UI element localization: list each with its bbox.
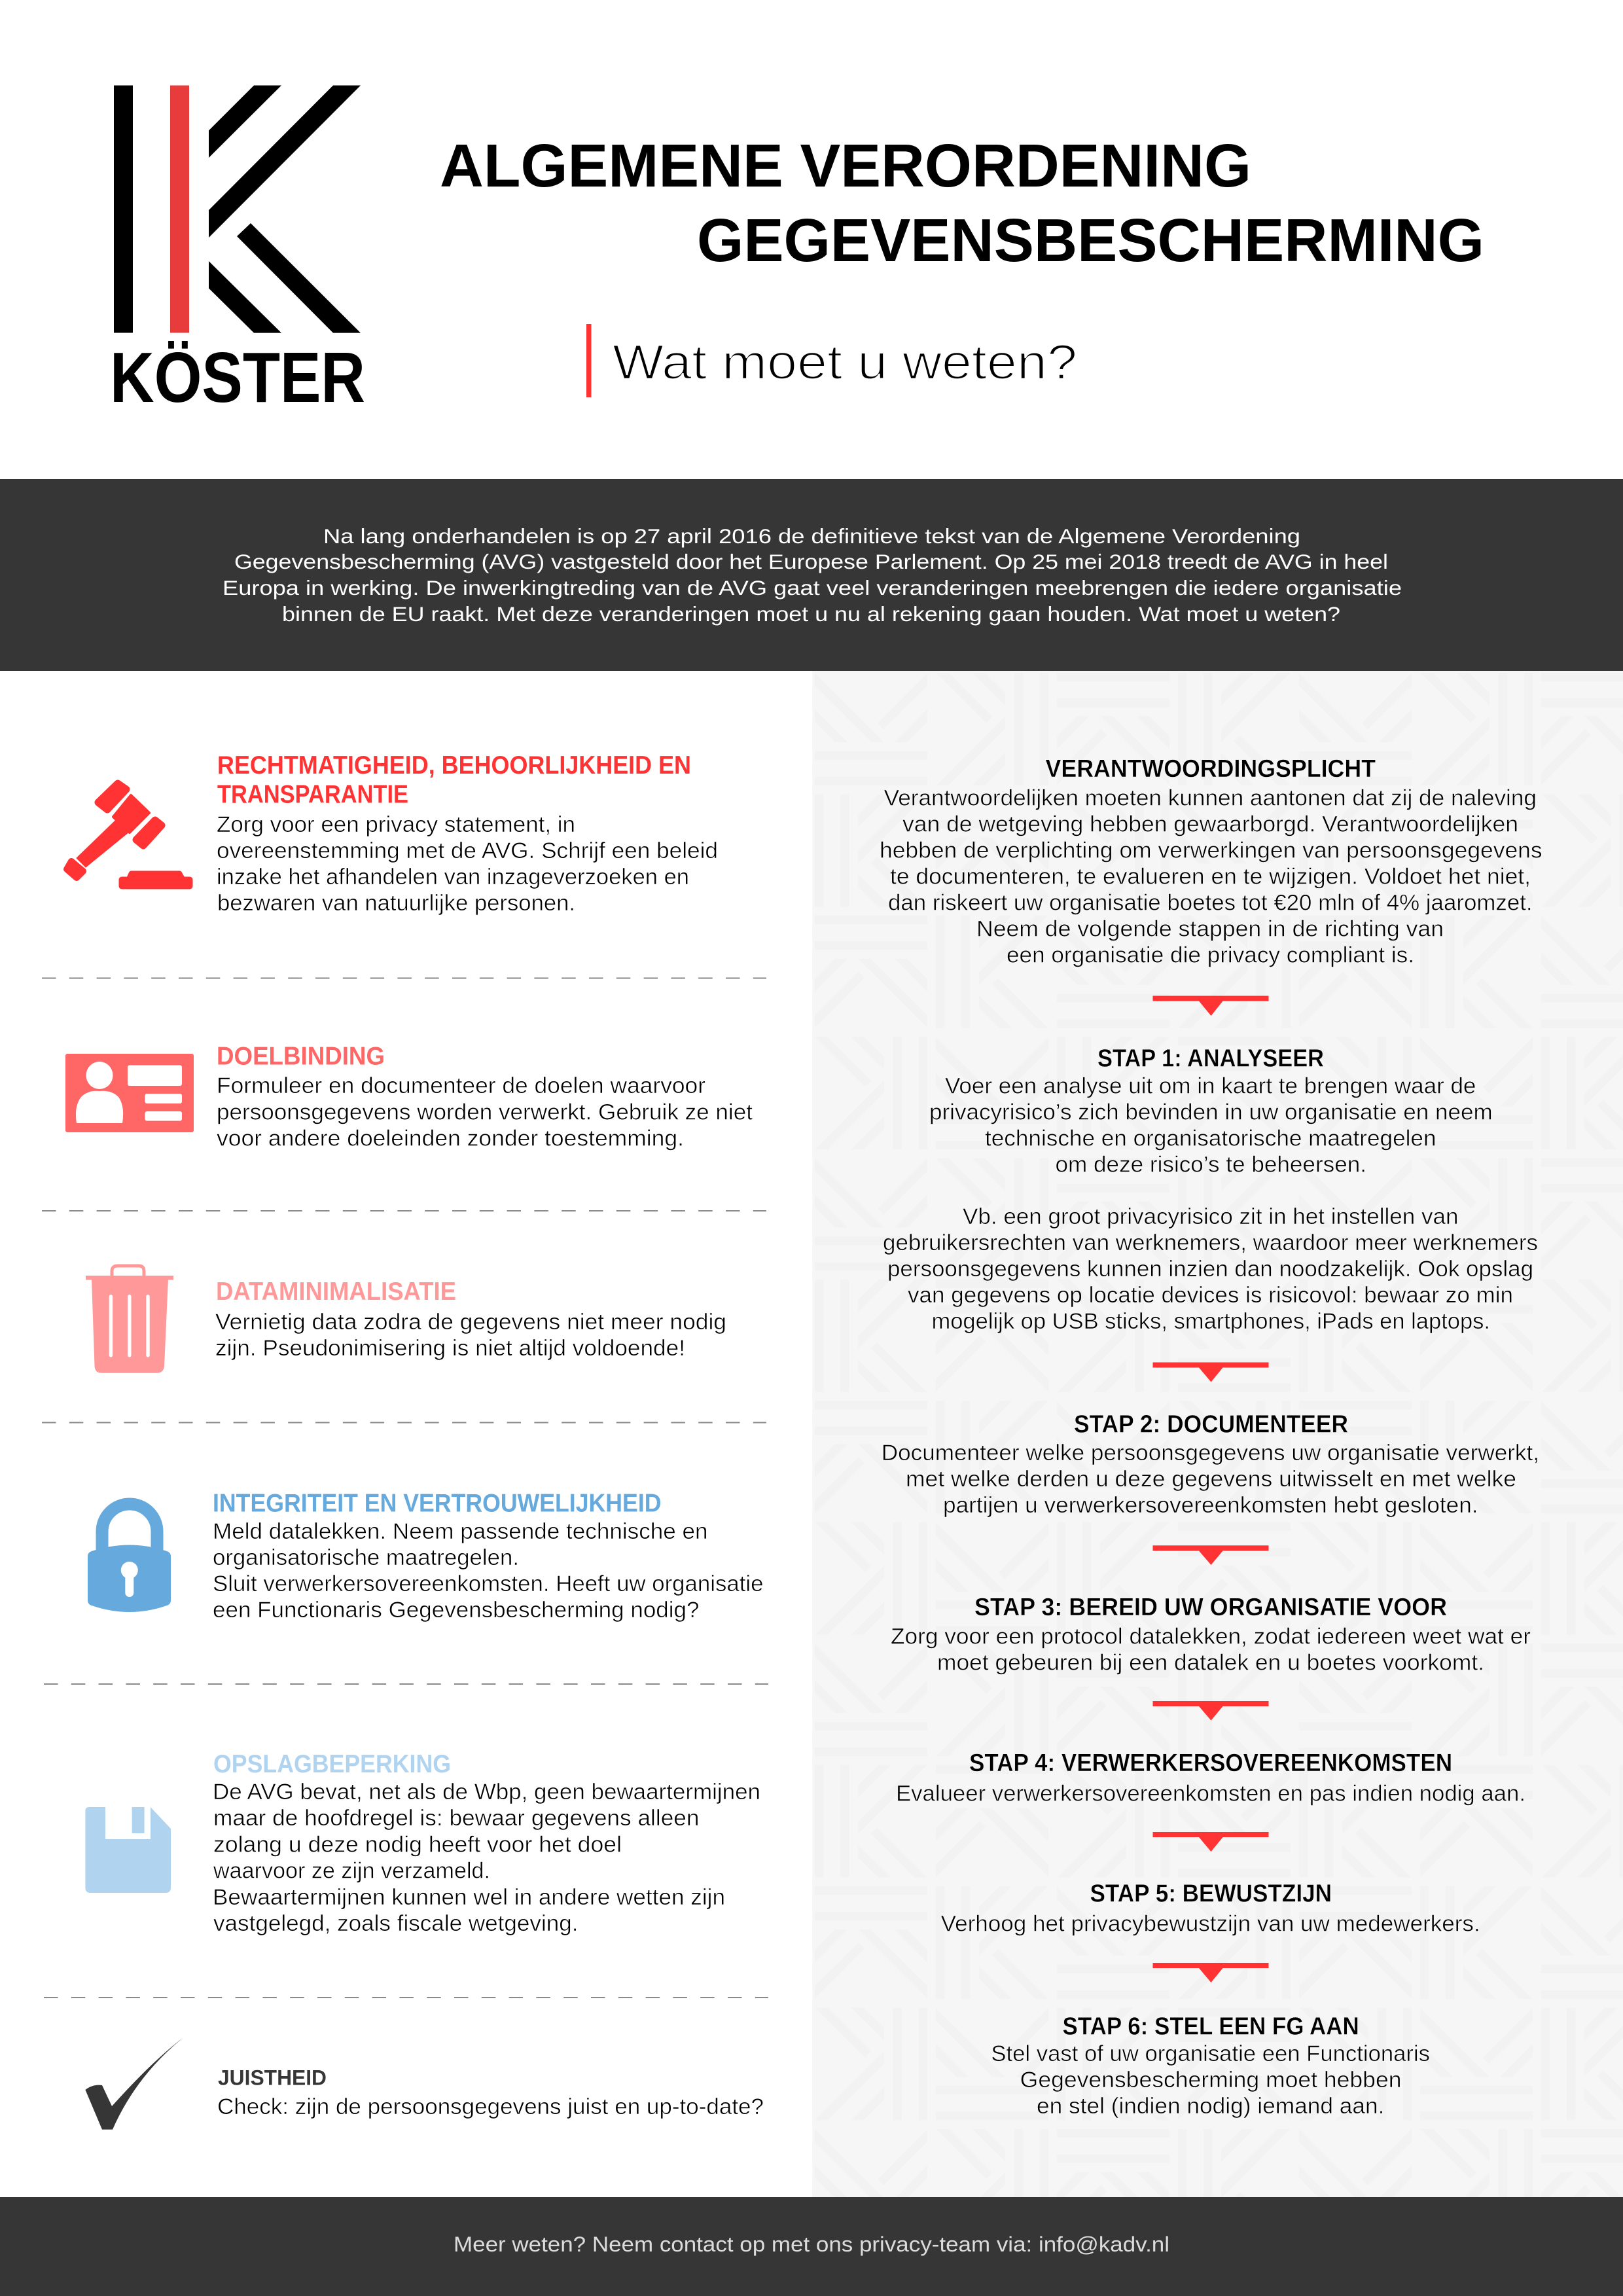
body text: Vernietig data zodra de gegevens niet meer nodig xyxy=(215,1310,726,1335)
body text xyxy=(991,2041,1430,2119)
body text: Zorg voor een privacy statement, in xyxy=(217,812,575,837)
body text: De AVG bevat, net als de Wbp, geen bewaartermijnen xyxy=(213,1780,760,1804)
body text: Vb. een groot privacyrisico zit in het instellen van xyxy=(963,1204,1458,1229)
heading: DATAMINIMALISATIE xyxy=(216,1278,456,1306)
body text: Sluit verwerkersovereenkomsten. Heeft uw organisatie xyxy=(213,1571,763,1596)
heading: STAP 5: BEWUSTZIJN xyxy=(1090,1880,1332,1908)
body text xyxy=(883,1073,1538,1334)
footer text: Meer weten? Neem contact op met ons privacy-team via: info@kadv.nl xyxy=(454,2233,1169,2256)
icon: floppy disk xyxy=(85,1807,171,1893)
title: GEGEVENSBESCHERMING xyxy=(697,206,1484,274)
subtitle with red bar: Wat moet u weten? xyxy=(613,334,1077,389)
arrow xyxy=(1153,996,1268,1016)
intro text: Na lang onderhandelen is op 27 april 2016 de definitieve tekst van de Algemene Verordening xyxy=(323,524,1300,548)
panel: right column patterned background xyxy=(812,671,1623,2296)
body text: een Functionaris Gegevensbescherming nodig? xyxy=(213,1598,699,1623)
body text xyxy=(217,1073,753,1151)
panel: juistheid xyxy=(85,2038,764,2130)
section: stap 5 xyxy=(941,1880,1480,1937)
body text: zolang u deze nodig heeft voor het doel xyxy=(213,1833,622,1857)
body text: gebruikersrechten van werknemers, waardoor meer werknemers xyxy=(883,1230,1538,1255)
body text: mogelijk op USB sticks, smartphones, iPads en laptops. xyxy=(932,1309,1490,1334)
subtitle with red bar xyxy=(586,324,1077,397)
body text: Stel vast of uw organisatie een Functionaris xyxy=(991,2041,1430,2066)
body text xyxy=(217,812,718,916)
body text: van gegevens op locatie devices is risicovol: bewaar zo min xyxy=(908,1283,1513,1308)
body text: een organisatie die privacy compliant is. xyxy=(1007,942,1414,967)
body text: privacyrisico’s zich bevinden in uw organisatie en neem xyxy=(929,1100,1493,1124)
body text: maar de hoofdregel is: bewaar gegevens alleen xyxy=(213,1806,699,1831)
icon: id card xyxy=(65,1054,194,1132)
body text: persoonsgegevens worden verwerkt. Gebruik ze niet xyxy=(217,1100,753,1124)
heading: DOELBINDING xyxy=(217,1042,385,1071)
arrow xyxy=(1153,1363,1268,1382)
heading: STAP 1: ANALYSEER xyxy=(1097,1045,1324,1072)
body text: Formuleer en documenteer de doelen waarvoor xyxy=(217,1073,705,1098)
header xyxy=(110,85,1484,418)
body text: overeenstemming met de AVG. Schrijf een beleid xyxy=(217,838,718,863)
heading: STAP 4: VERWERKERSOVEREENKOMSTEN xyxy=(969,1749,1452,1777)
body text xyxy=(880,785,1543,967)
body text: Meld datalekken. Neem passende technische en xyxy=(213,1519,708,1544)
intro text: Gegevensbescherming (AVG) vastgesteld door het Europese Parlement. Op 25 mei 2018 treedt de AVG in heel xyxy=(234,550,1388,573)
body text: vastgelegd, zoals fiscale wetgeving. xyxy=(213,1911,579,1936)
body text: Verhoog het privacybewustzijn van uw medewerkers. xyxy=(941,1912,1480,1937)
body text: persoonsgegevens kunnen inzien dan noodzakelijk. Ook opslag xyxy=(887,1257,1533,1282)
arrow xyxy=(1153,1701,1268,1721)
body text: en stel (indien nodig) iemand aan. xyxy=(1037,2094,1384,2119)
body text: om deze risico’s te beheersen. xyxy=(1055,1152,1366,1177)
body text: organisatorische maatregelen. xyxy=(213,1545,519,1570)
heading: VERANTWOORDINGSPLICHT xyxy=(1046,755,1376,783)
section: stap 6 xyxy=(991,2013,1430,2119)
body text: dan riskeert uw organisatie boetes tot €20 mln of 4% jaaromzet. xyxy=(888,890,1533,915)
intro text: binnen de EU raakt. Met deze veranderingen moet u nu al rekening gaan houden. Wat moet u weten? xyxy=(282,602,1340,626)
footer xyxy=(0,2197,1623,2296)
body text xyxy=(213,1519,763,1623)
heading: STAP 3: BEREID UW ORGANISATIE VOOR xyxy=(974,1594,1447,1621)
heading: STAP 6: STEL EEN FG AAN xyxy=(1063,2013,1359,2041)
section: stap 1 xyxy=(883,1045,1538,1334)
panel: integriteit xyxy=(88,1490,763,1623)
section: stap 4 xyxy=(896,1749,1525,1806)
arrow xyxy=(1153,1832,1268,1852)
body text: inzake het afhandelen van inzageverzoeken en xyxy=(217,865,689,889)
body text: Voer een analyse uit om in kaart te brengen waar de xyxy=(945,1073,1476,1098)
body text: waarvoor ze zijn verzameld. xyxy=(213,1859,490,1884)
body text: technische en organisatorische maatregelen xyxy=(985,1126,1436,1151)
heading: INTEGRITEIT EN VERTROUWELIJKHEID xyxy=(213,1490,661,1517)
heading xyxy=(217,751,691,809)
body text: zijn. Pseudonimisering is niet altijd voldoende! xyxy=(215,1336,685,1361)
body text: Evalueer verwerkersovereenkomsten en pas indien nodig aan. xyxy=(896,1781,1525,1806)
body text: Verantwoordelijken moeten kunnen aantonen dat zij de naleving xyxy=(884,785,1537,810)
body text: Bewaartermijnen kunnen wel in andere wetten zijn xyxy=(213,1885,725,1910)
body text: Documenteer welke persoonsgegevens uw organisatie verwerkt, xyxy=(882,1441,1539,1465)
body text: te documenteren, te evalueren en te wijzigen. Voldoet het niet, xyxy=(890,864,1531,889)
section: verantwoordingsplicht xyxy=(880,755,1543,967)
body text: van de wetgeving hebben gewaarborgd. Verantwoordelijken xyxy=(902,812,1518,836)
section: stap 3 xyxy=(891,1594,1531,1675)
body text: met welke derden u deze gegevens uitwisselt en met welke xyxy=(906,1467,1516,1492)
icon: trash bin xyxy=(86,1266,173,1373)
icon: check mark xyxy=(85,2038,183,2130)
body text xyxy=(213,1780,760,1936)
panel: dataminimalisatie xyxy=(86,1266,726,1373)
body text xyxy=(215,1310,726,1361)
arrow xyxy=(1153,1963,1268,1982)
body text: Check: zijn de persoonsgegevens juist en up-to-date? xyxy=(217,2094,764,2119)
title xyxy=(440,132,1484,274)
body text: Zorg voor een protocol datalekken, zodat iedereen weet wat er xyxy=(891,1624,1531,1649)
heading: OPSLAGBEPERKING xyxy=(213,1750,451,1778)
body text: Neem de volgende stappen in de richting van xyxy=(976,916,1444,941)
intro text xyxy=(223,524,1402,626)
body text: bezwaren van natuurlijke personen. xyxy=(217,891,575,916)
intro text: Europa in werking. De inwerkingtreding van de AVG gaat veel veranderingen meebrengen die iedere organisatie xyxy=(223,576,1402,600)
icon: gavel xyxy=(67,783,190,886)
panel: doelbinding xyxy=(65,1042,753,1151)
icon: padlock xyxy=(88,1504,171,1612)
body text: voor andere doeleinden zonder toestemming. xyxy=(217,1126,684,1151)
body text: partijen u verwerkersovereenkomsten hebt gesloten. xyxy=(943,1493,1478,1518)
logo: Köster xyxy=(110,85,365,418)
heading: RECHTMATIGHEID, BEHOORLIJKHEID EN xyxy=(217,751,691,780)
panel: rechtmatigheid xyxy=(67,751,718,916)
heading: STAP 2: DOCUMENTEER xyxy=(1074,1411,1348,1439)
logo: Köster: KÖSTER xyxy=(110,338,365,418)
title: ALGEMENE VERORDENING xyxy=(440,132,1251,200)
body text: Gegevensbescherming moet hebben xyxy=(1020,2068,1402,2092)
panel: opslagbeperking xyxy=(85,1750,760,1936)
section: stap 2 xyxy=(882,1411,1539,1518)
body text xyxy=(891,1624,1531,1675)
body text: moet gebeuren bij een datalek en u boetes voorkomt. xyxy=(937,1650,1484,1675)
arrow xyxy=(1153,1545,1268,1565)
body text: hebben de verplichting om verwerkingen van persoonsgegevens xyxy=(880,838,1543,863)
body text xyxy=(882,1441,1539,1518)
heading: TRANSPARANTIE xyxy=(217,780,408,809)
intro band xyxy=(0,479,1623,671)
heading: JUISTHEID xyxy=(218,2066,327,2089)
